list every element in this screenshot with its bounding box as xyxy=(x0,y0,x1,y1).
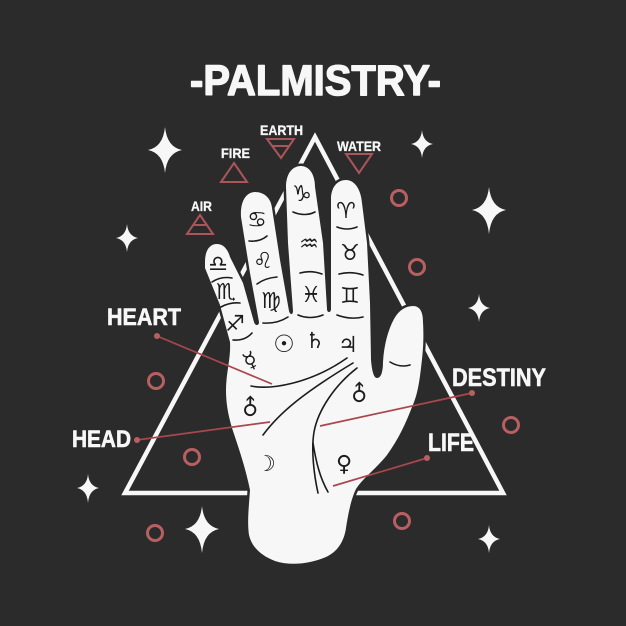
element: fire xyxy=(221,145,250,182)
zodiac and planet symbols: ♂︎ xyxy=(344,378,376,410)
line labels: HEART xyxy=(107,304,181,331)
zodiac and planet symbols: ♏︎ xyxy=(216,280,236,305)
element: air xyxy=(187,198,213,234)
finger creases xyxy=(212,212,410,366)
triangle frame xyxy=(125,137,503,493)
line labels: HEAD xyxy=(72,426,131,453)
zodiac and planet symbols: ♈︎ xyxy=(336,199,356,224)
element: air: AIR xyxy=(191,198,212,214)
decorative stars xyxy=(77,127,506,553)
element: earth xyxy=(260,122,303,158)
line labels: LIFE xyxy=(428,429,474,457)
zodiac and planet symbols xyxy=(208,182,376,477)
zodiac and planet symbols: ♃︎ xyxy=(338,333,358,358)
zodiac and planet symbols: ☉︎ xyxy=(273,330,295,358)
element: water xyxy=(337,138,381,173)
zodiac and planet symbols: ♓︎ xyxy=(301,283,321,308)
zodiac and planet symbols: ♍︎ xyxy=(261,289,281,314)
zodiac and planet symbols: ♐︎ xyxy=(225,312,245,337)
label pointer lines xyxy=(134,333,475,486)
zodiac and planet symbols: ☿︎ xyxy=(239,347,262,376)
zodiac and planet symbols: ♊︎ xyxy=(340,284,360,309)
zodiac and planet symbols: ☽︎ xyxy=(256,452,276,477)
element: fire: FIRE xyxy=(221,145,250,161)
zodiac and planet symbols: ♀︎ xyxy=(336,452,352,477)
element: earth: EARTH xyxy=(260,122,303,138)
zodiac and planet symbols: ♌︎ xyxy=(253,249,273,274)
element: water: WATER xyxy=(337,138,381,154)
line labels xyxy=(72,304,546,457)
zodiac and planet symbols: ♋︎ xyxy=(247,208,267,233)
title: -PALMISTRY- xyxy=(190,57,441,105)
red ring markers xyxy=(148,190,518,540)
line labels: DESTINY xyxy=(452,364,546,392)
zodiac and planet symbols: ♒︎ xyxy=(299,232,319,257)
zodiac and planet symbols: ♂︎ xyxy=(235,392,267,424)
zodiac and planet symbols: ♑︎ xyxy=(292,182,312,207)
hand silhouette xyxy=(205,166,423,564)
palm lines xyxy=(251,358,357,493)
zodiac and planet symbols: ♎︎ xyxy=(208,252,228,277)
zodiac and planet symbols: ♄︎ xyxy=(305,329,325,354)
zodiac and planet symbols: ♉︎ xyxy=(340,241,360,266)
